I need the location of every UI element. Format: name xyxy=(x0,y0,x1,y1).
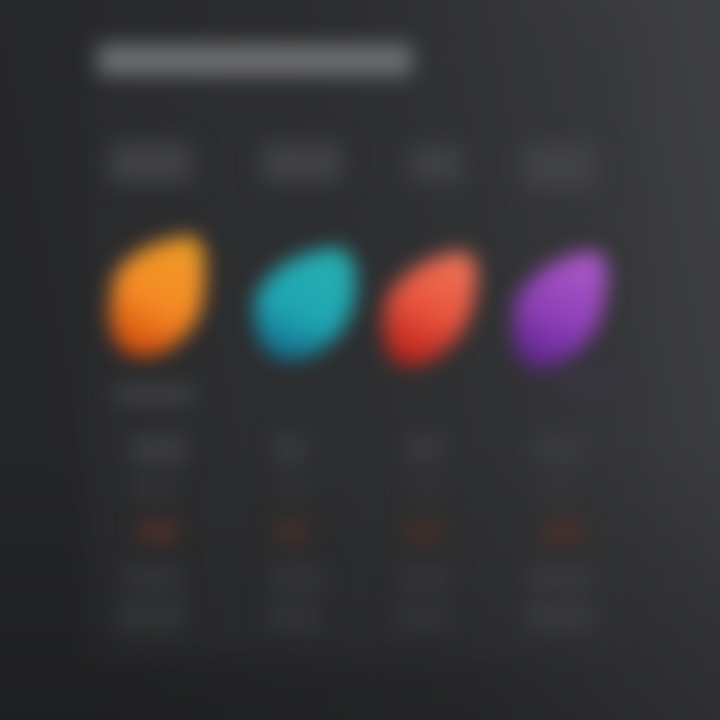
column 2 details xyxy=(268,434,324,630)
purple glow below blob xyxy=(558,366,622,398)
column 1 details xyxy=(116,384,194,630)
icon: red blob xyxy=(384,252,477,366)
icon: orange blob xyxy=(110,236,205,356)
column headings xyxy=(110,144,596,188)
column 3 details xyxy=(398,434,452,630)
panel: card xyxy=(88,30,628,660)
icon: teal blob xyxy=(254,248,356,360)
column 4 details xyxy=(526,434,594,630)
title xyxy=(98,44,412,76)
icon: purple blob xyxy=(513,252,607,368)
